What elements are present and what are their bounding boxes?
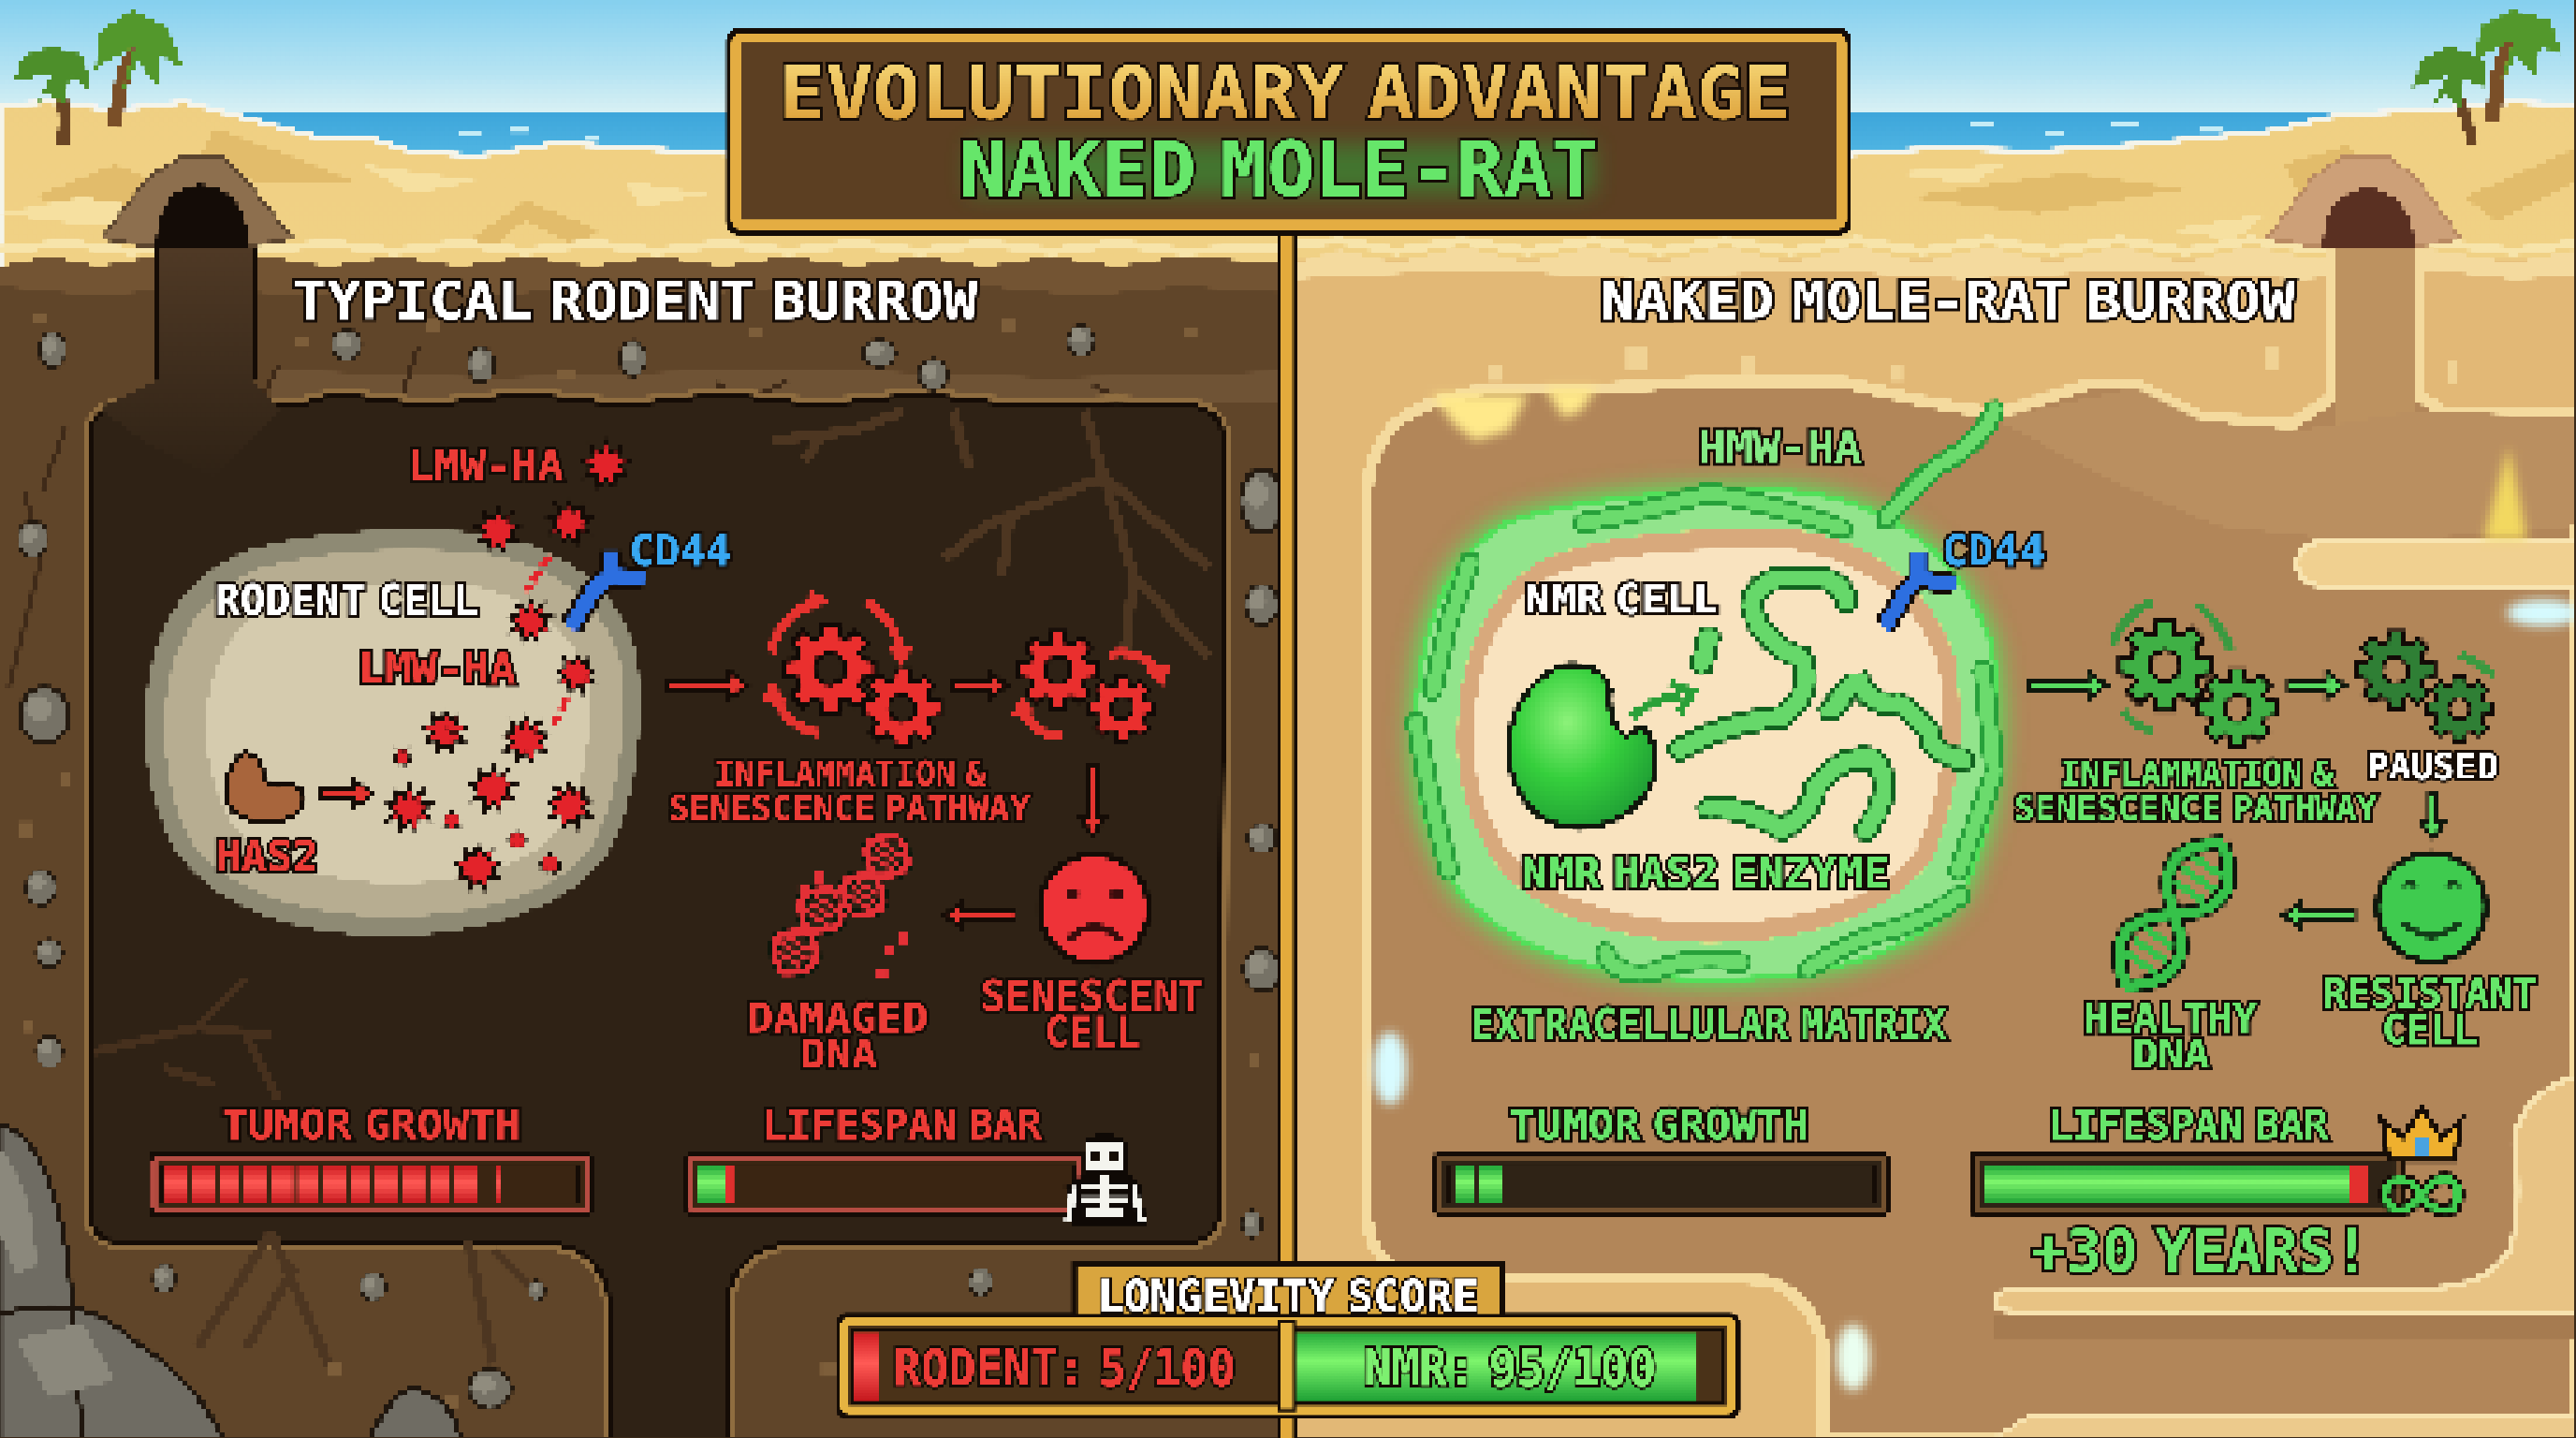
rodent cell bbox=[144, 530, 640, 937]
label paused: PAUSED bbox=[2367, 746, 2499, 788]
sand wavy band bbox=[0, 240, 2576, 252]
chamber cracks bbox=[95, 977, 279, 1101]
damaged DNA bbox=[764, 826, 917, 984]
label LMW-HA inside: LMW-HA bbox=[359, 644, 516, 694]
right side ledge bbox=[2297, 539, 2576, 588]
left soil bbox=[0, 257, 1281, 1438]
green glow crystal bottom bbox=[1837, 1325, 1869, 1390]
green title glow bbox=[970, 144, 1593, 194]
skeleton icon bbox=[1064, 1134, 1147, 1225]
label inflammation pathway: INFLAMMATION & bbox=[714, 754, 987, 794]
right soil bbox=[1288, 259, 2576, 1438]
label rodent cell: RODENT CELL bbox=[215, 576, 478, 625]
label damaged DNA bbox=[748, 994, 929, 1078]
ceiling glow lights bbox=[1432, 388, 1597, 440]
CD44 receptor bbox=[570, 550, 644, 628]
lifespan bar rodent bbox=[688, 1153, 1083, 1214]
label CD44: CD44 bbox=[629, 526, 731, 576]
HMW-HA strands in cell bbox=[1679, 578, 1963, 829]
label inflammation pathway: SENESCENCE PATHWAY bbox=[2014, 788, 2378, 829]
longevity score panel bbox=[840, 1264, 1736, 1415]
dune shading bbox=[33, 128, 2576, 246]
left chamber bbox=[91, 394, 1224, 1438]
lifespan bar NMR bbox=[1973, 1153, 2400, 1214]
label healthy DNA: DNA bbox=[2132, 1031, 2210, 1078]
label inflammation pathway: INFLAMMATION & bbox=[2060, 754, 2334, 794]
callout plus thirty years: +30 YEARS! bbox=[2030, 1217, 2369, 1286]
longevity score heading: LONGEVITY SCORE bbox=[1097, 1271, 1479, 1323]
label HAS2: HAS2 bbox=[215, 831, 318, 881]
soil lower lighter band bbox=[271, 368, 1281, 401]
label lifespan bar: LIFESPAN BAR bbox=[2049, 1101, 2329, 1149]
label inflammation pathway: SENESCENCE PATHWAY bbox=[668, 788, 1031, 829]
label resistant cell: RESISTANT bbox=[2323, 970, 2537, 1018]
enzyme arrow bbox=[1633, 683, 1692, 716]
paused gears bbox=[2356, 632, 2494, 741]
bottom sand strip bbox=[1995, 1416, 2576, 1438]
left soil top band bbox=[0, 257, 1281, 296]
heading line two: NAKED MOLE-RAT bbox=[959, 126, 1599, 214]
NMR HAS2 enzyme bbox=[1509, 665, 1655, 829]
beach sand bbox=[0, 102, 2576, 287]
panel heading: NAKED MOLE-RAT BURROW bbox=[1600, 271, 2295, 332]
extracellular matrix glow bbox=[1410, 484, 2003, 986]
CD44 receptor bbox=[1884, 550, 1955, 628]
panel: typical rodent burrow bbox=[144, 271, 1203, 1225]
resistant cell face bbox=[2378, 853, 2485, 961]
NMR cell interior bbox=[1473, 549, 1943, 924]
label tumor growth: TUMOR GROWTH bbox=[222, 1101, 520, 1149]
divider between burrows bbox=[1278, 230, 1297, 1438]
large green gears bbox=[2113, 601, 2276, 747]
palm trees left bbox=[13, 10, 184, 144]
left soil rocks bbox=[18, 325, 1283, 1408]
rodent score fill bbox=[855, 1333, 879, 1401]
left mound bbox=[102, 158, 292, 246]
left tunnel bbox=[98, 246, 279, 477]
sandy soil specks bbox=[1486, 348, 2458, 385]
label NMR HAS2 enzyme: NMR HAS2 ENZYME bbox=[1521, 848, 1889, 898]
foam and sea highlights bbox=[386, 124, 2221, 138]
label LMW-HA outside: LMW-HA bbox=[407, 443, 564, 491]
yellow crystal bbox=[2484, 447, 2526, 539]
ledge shadow bbox=[1995, 1314, 2576, 1341]
label CD44: CD44 bbox=[1942, 526, 2045, 576]
senescent cell face bbox=[1040, 855, 1149, 963]
healthy DNA bbox=[2101, 827, 2247, 1003]
label resistant cell bbox=[2323, 970, 2537, 1054]
label NMR cell: NMR CELL bbox=[1525, 576, 1719, 624]
right chamber bbox=[1367, 246, 2576, 1438]
palm trees right bbox=[2411, 10, 2563, 144]
label senescent cell: SENESCENT bbox=[981, 972, 1203, 1021]
tumor growth bar bbox=[151, 1153, 590, 1214]
crown icon bbox=[2382, 1108, 2461, 1160]
banner frame bbox=[729, 31, 1848, 232]
surface cracks left bbox=[8, 345, 1134, 690]
arrow to damaged DNA bbox=[944, 902, 1016, 929]
arrow HAS2 to fragments bbox=[320, 781, 373, 807]
label resistant cell: CELL bbox=[2382, 1006, 2478, 1054]
score centre divider bbox=[1280, 1321, 1295, 1410]
pathway arrow 1 bbox=[2029, 672, 2106, 698]
NMR score: NMR: 95/100 bbox=[1364, 1338, 1656, 1398]
LMW-HA fragments bbox=[386, 442, 629, 890]
label extracellular matrix: EXTRACELLULAR MATRIX bbox=[1471, 999, 1947, 1049]
label healthy DNA: HEALTHY bbox=[2083, 994, 2258, 1042]
chamber light shade bbox=[1996, 388, 2576, 542]
blue glow crystal left bbox=[1373, 1032, 1406, 1105]
score tab bbox=[1075, 1264, 1501, 1323]
right tunnel bbox=[2334, 246, 2413, 427]
boulders bottom left bbox=[0, 1125, 460, 1438]
pathway arrow 1 bbox=[667, 672, 748, 698]
panel heading: TYPICAL RODENT BURROW bbox=[292, 271, 977, 332]
label inflammation pathway bbox=[2014, 754, 2378, 829]
label tumor growth: TUMOR GROWTH bbox=[1510, 1101, 1808, 1149]
right mound hole bbox=[2323, 187, 2415, 246]
tunnel walls bbox=[156, 246, 255, 381]
heading line one: EVOLUTIONARY ADVANTAGE bbox=[779, 51, 1791, 136]
arrow down to senescent cell bbox=[1079, 764, 1105, 835]
label damaged DNA: DNA bbox=[800, 1031, 877, 1078]
label HMW-HA: HMW-HA bbox=[1699, 422, 1862, 472]
label healthy DNA bbox=[2083, 994, 2258, 1078]
NMR score fill bbox=[1296, 1333, 1697, 1401]
soil mottling bbox=[20, 313, 1258, 1407]
title banner bbox=[729, 31, 1848, 232]
label damaged DNA: DAMAGED bbox=[748, 994, 929, 1042]
label lifespan bar: LIFESPAN BAR bbox=[762, 1101, 1042, 1149]
second gears bbox=[1010, 632, 1170, 741]
panel: naked mole-rat burrow bbox=[1410, 271, 2537, 1286]
label senescent cell bbox=[981, 972, 1203, 1057]
pathway arrow 2 bbox=[2289, 672, 2345, 698]
sea bbox=[0, 113, 2576, 172]
arrow down to resistant cell bbox=[2420, 794, 2446, 838]
right mound bbox=[2267, 158, 2461, 246]
blue glow crystal right bbox=[2507, 600, 2576, 626]
sky bbox=[0, 0, 2576, 122]
NMR cell membrane bbox=[1457, 529, 1960, 944]
boulder highlights bbox=[0, 1151, 115, 1397]
dune highlights bbox=[0, 165, 2267, 240]
right lower sand block bbox=[1995, 1077, 2576, 1312]
arrow to healthy DNA bbox=[2284, 902, 2354, 929]
left mound hole bbox=[156, 184, 250, 246]
label senescent cell: CELL bbox=[1045, 1007, 1140, 1057]
tumor growth bar bbox=[1436, 1153, 1886, 1214]
infinity icon bbox=[2385, 1179, 2458, 1211]
roots in chamber bbox=[198, 411, 1208, 1364]
HAS2 enzyme icon bbox=[225, 753, 304, 822]
rodent score: RODENT: 5/100 bbox=[894, 1338, 1236, 1398]
left chamber inner outline bbox=[91, 394, 1224, 1438]
matrix HA chains bbox=[1416, 411, 1995, 974]
score frame bbox=[840, 1316, 1736, 1415]
large gears bbox=[761, 588, 941, 747]
right soil top band bbox=[1288, 246, 2576, 279]
pathway arrow 2 bbox=[953, 672, 1007, 698]
label inflammation pathway bbox=[668, 754, 1031, 829]
